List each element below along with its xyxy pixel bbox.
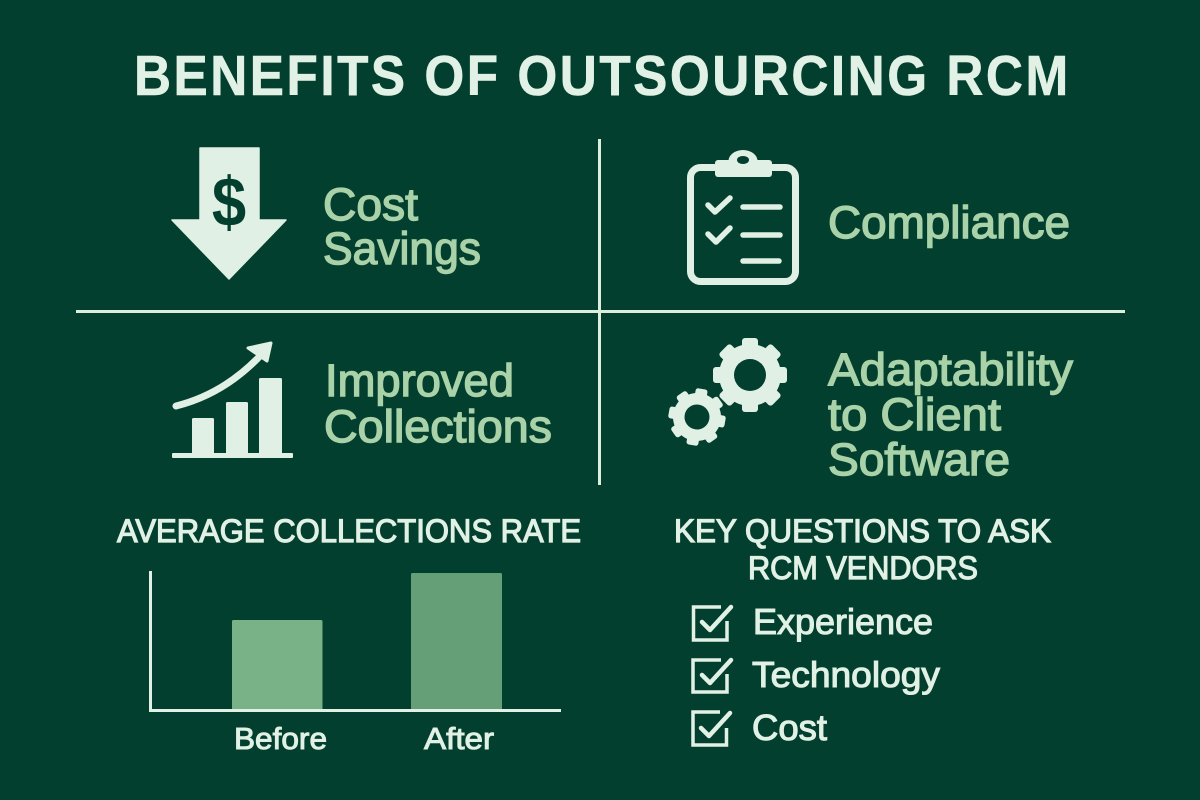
panel: improved collections: [172, 343, 552, 458]
label: adaptability to client software: to Client: [828, 389, 1002, 440]
bar: before: [232, 620, 322, 710]
icon: down arrow with dollar sign: [172, 148, 286, 279]
label: improved collections: Collections: [324, 401, 552, 452]
bar: after: [411, 573, 502, 710]
icon: down arrow with dollar sign: $: [212, 162, 246, 241]
label: cost savings: Cost: [323, 179, 419, 230]
checklist item: cost: [693, 707, 827, 748]
label: improved collections: Improved: [325, 355, 514, 406]
icon: two gears: [664, 338, 787, 450]
bar chart: [150, 571, 561, 756]
heading: average collections rate: AVERAGE COLLECTIONS RATE: [117, 513, 581, 549]
label: adaptability to client software: Adaptability: [828, 344, 1074, 395]
panel: compliance: [690, 150, 1070, 282]
axis label: before: Before: [234, 721, 327, 756]
icon: clipboard checklist: [690, 150, 796, 282]
panel: adaptability: [664, 338, 1074, 485]
checklist item: technology: Technology: [752, 654, 940, 695]
checklist item: experience: Experience: [753, 601, 933, 642]
label: adaptability to client software: Software: [828, 434, 1010, 485]
label: compliance: Compliance: [828, 197, 1070, 248]
heading: key questions to ask rcm vendors: KEY QUESTIONS TO ASK: [674, 513, 1051, 549]
panel: average collections rate: [117, 513, 581, 756]
axis label: after: After: [424, 721, 494, 756]
panel: key questions: [674, 513, 1051, 748]
label: cost savings: Savings: [323, 223, 481, 274]
checklist item: cost: Cost: [752, 707, 827, 748]
panel: cost savings: [172, 148, 481, 279]
heading: key questions to ask rcm vendors: RCM VENDORS: [748, 550, 978, 586]
icon: rising bar chart with arrow: [172, 343, 293, 458]
title: BENEFITS OF OUTSOURCING RCM: [134, 45, 1068, 108]
